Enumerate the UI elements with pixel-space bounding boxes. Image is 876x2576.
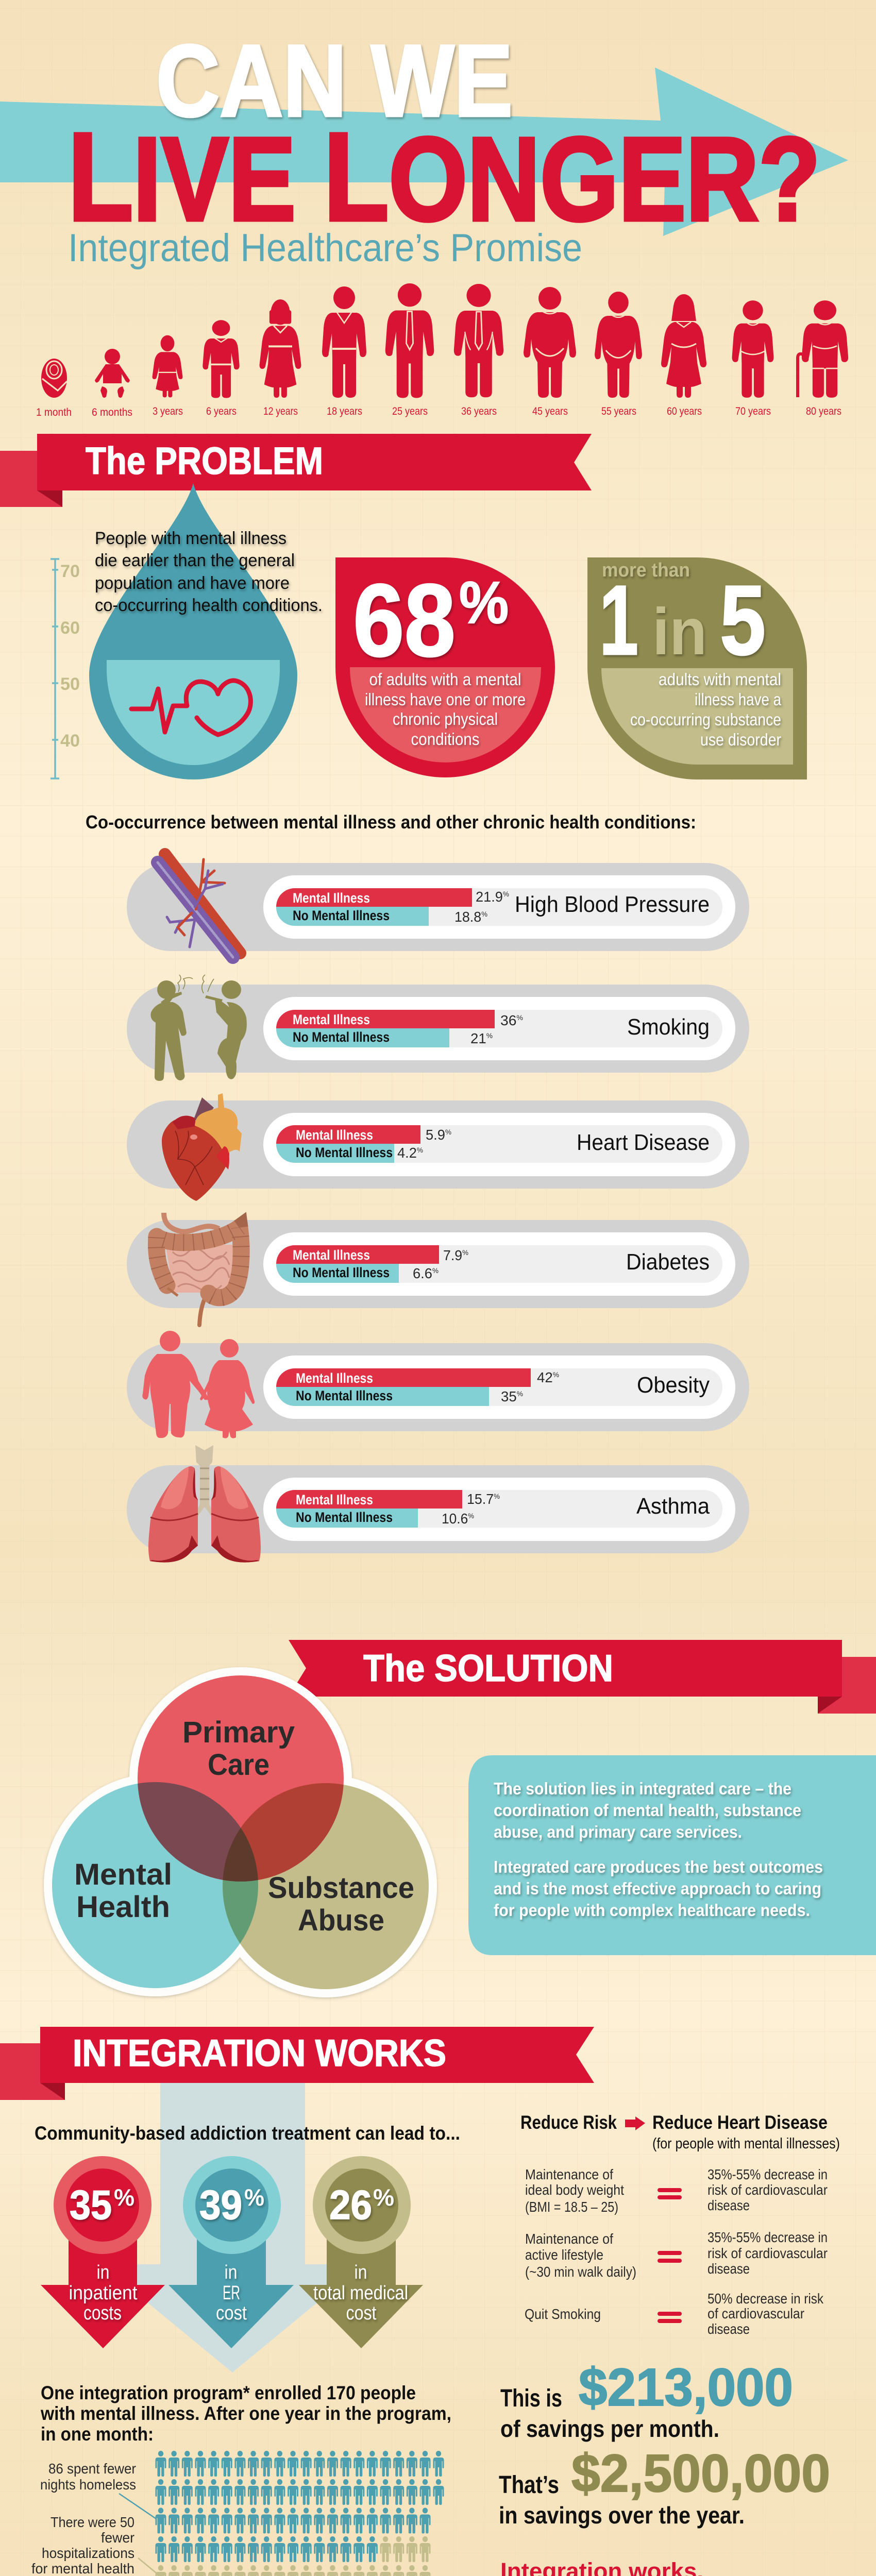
panel: heart disease: Mental Illness (296, 1127, 373, 1143)
panel: 68 percent (335, 557, 555, 777)
list: maintenance of active lifestyle: disease (707, 2261, 750, 2277)
panel: 1 in 5: illness have a (695, 690, 782, 709)
stat arrow: total medical cost: cost (346, 2302, 377, 2324)
heading: one integration program: with mental illness. After one year in the program, (40, 2403, 451, 2424)
panel: obesity: Mental Illness (296, 1370, 373, 1386)
icon: couple (142, 1331, 255, 1438)
text: people with mental illness: die earlier than the general (95, 551, 295, 570)
heading: reduce risk, reduce heart disease (520, 2112, 840, 2152)
pictogram: 170 people (156, 2451, 444, 2576)
icon: 12 years (260, 299, 301, 398)
icon: blood vessel (158, 854, 240, 957)
panel: obesity: 35 (501, 1388, 517, 1404)
labels: ages: 12 years (263, 405, 298, 417)
list: maintenance of ideal body weight: Maintenance of (525, 2166, 613, 2182)
panel: diabetes: Diabetes (626, 1249, 710, 1275)
labels: ages: 25 years (392, 405, 428, 417)
banner: integration works: INTEGRATION WORKS (73, 2032, 446, 2074)
stat arrow: inpatient costs: in (97, 2262, 109, 2283)
chart: venn diagram (44, 1667, 437, 1997)
panel: heart disease: Heart Disease (577, 1130, 710, 1155)
labels: ages: 6 months (92, 406, 132, 418)
icon: 45 years (524, 287, 576, 398)
banner: the problem: The PROBLEM (86, 439, 323, 482)
heading: co-occurrence: Co-occurrence between mental illness and other chronic health conditions: (86, 811, 696, 833)
panel: smoking (127, 985, 749, 1073)
panel: 1 in 5 (587, 557, 807, 779)
icon: lungs (148, 1445, 261, 1563)
labels: ages: 3 years (153, 405, 183, 417)
panel: solution text: The solution lies in integrated care – the (494, 1779, 791, 1798)
subtitle: Integrated Healthcare’s Promise (68, 226, 582, 270)
life expectancy scale: 70 (60, 562, 80, 581)
heading: reduce risk, reduce heart disease: (for people with mental illnesses) (652, 2136, 840, 2152)
chart: venn diagram: Care (208, 1748, 269, 1782)
text: savings over the year: $2,500,000 (571, 2444, 830, 2503)
stat arrow: inpatient costs: inpatient (69, 2282, 138, 2304)
stat arrow: total medical cost (299, 2156, 423, 2348)
list: maintenance of ideal body weight: risk of cardiovascular (707, 2182, 828, 2198)
list: quit smoking (525, 2291, 824, 2337)
stat arrow: ER cost: ER (223, 2282, 240, 2304)
banner: integration works (0, 2027, 594, 2100)
icon: 25 years (385, 283, 434, 398)
labels: ages: 1 month (36, 406, 72, 418)
list: maintenance of active lifestyle (525, 2229, 828, 2280)
labels: ages: 60 years (667, 405, 702, 417)
banner: the solution: The SOLUTION (363, 1648, 613, 1689)
stat arrow: inpatient costs: costs (83, 2302, 122, 2324)
panel: diabetes: Mental Illness (293, 1247, 370, 1263)
heading: one integration program: in one month: (41, 2424, 154, 2445)
panel: obesity: % (553, 1370, 559, 1379)
icon: 6 months baby (95, 349, 130, 398)
arrow: large pale background (101, 2083, 364, 2372)
banner: the problem (0, 434, 592, 507)
text: savings over the year: in savings over the year. (499, 2502, 745, 2529)
list: maintenance of active lifestyle: active lifestyle (525, 2247, 603, 2263)
panel: solution text (468, 1755, 876, 1955)
panel: smoking: % (516, 1013, 523, 1022)
panel: high blood pressure: High Blood Pressure (515, 892, 710, 917)
panel: smoking: 21 (470, 1030, 486, 1046)
list: maintenance of ideal body weight: ideal body weight (525, 2182, 624, 2198)
arrow: red (625, 2116, 645, 2130)
panel: smoking: No Mental Illness (293, 1029, 390, 1045)
panel: asthma: 10.6 (442, 1511, 470, 1527)
panel: asthma: Mental Illness (296, 1492, 373, 1507)
stat arrow: total medical cost: 26 (329, 2182, 372, 2228)
panel: 1 in 5: more than (602, 560, 690, 581)
text: savings per month: This is (500, 2385, 562, 2412)
stat arrow: ER cost: in (225, 2262, 237, 2283)
panel: heart disease (127, 1100, 749, 1189)
chart: venn diagram: Abuse (298, 1904, 384, 1937)
panel: 1 in 5: in (652, 595, 707, 669)
stat arrow: inpatient costs: % (114, 2184, 134, 2211)
labels: ages: 80 years (806, 405, 841, 417)
panel: smoking: Mental Illness (293, 1012, 370, 1027)
list: quit smoking: of cardiovascular (707, 2306, 804, 2321)
panel: heart disease: No Mental Illness (296, 1145, 393, 1160)
panel: 1 in 5: 1 (599, 565, 638, 675)
panel: 1 in 5: co-occurring substance (630, 710, 781, 729)
text: people with mental illness: People with mental illness (95, 529, 287, 548)
panel: high blood pressure: % (481, 910, 487, 918)
panel: 1 in 5: 5 (720, 565, 766, 675)
panel: 68 percent: chronic physical (393, 709, 498, 728)
text: people with mental illness (95, 529, 323, 615)
icon: 3 years (153, 335, 182, 397)
text: people with mental illness: population and have more (95, 573, 290, 593)
list: maintenance of ideal body weight: disease (707, 2197, 750, 2213)
text: savings per month: $213,000 (579, 2358, 793, 2417)
icon: 70 years (732, 300, 773, 398)
panel: high blood pressure: No Mental Illness (293, 908, 390, 923)
text: savings per month: of savings per month. (500, 2415, 719, 2442)
panel: smoking: 36 (500, 1012, 516, 1028)
panel: diabetes (127, 1220, 749, 1308)
heading: reduce risk, reduce heart disease: Reduce Heart Disease (652, 2112, 828, 2133)
stat arrow: ER cost: cost (216, 2302, 247, 2324)
icon: heart (162, 1093, 242, 1201)
panel: obesity: No Mental Illness (296, 1388, 393, 1403)
icon: 60 years (661, 294, 706, 398)
panel: asthma: No Mental Illness (296, 1510, 393, 1525)
panel: asthma: 15.7 (467, 1491, 495, 1507)
chart: life stages figures (41, 283, 848, 398)
list: maintenance of active lifestyle: 35%-55% decrease in (707, 2229, 828, 2245)
panel: asthma: Asthma (636, 1494, 710, 1519)
stat arrow: total medical cost: total medical (313, 2282, 408, 2304)
chart: venn diagram: Health (76, 1890, 170, 1924)
labels: ages: 6 years (206, 405, 237, 417)
panel: heart disease: % (417, 1146, 423, 1154)
title: Can we: CAN WE (156, 24, 513, 138)
labels: pictogram callouts: 86 spent fewer (48, 2461, 136, 2477)
chart: venn diagram: Mental (74, 1858, 172, 1891)
panel: diabetes: 7.9 (443, 1247, 463, 1263)
title: Live longer: LIVE LONGER? (68, 107, 820, 247)
panel: high blood pressure: 18.8 (454, 909, 482, 925)
icon: 1 month baby (41, 359, 67, 398)
life expectancy scale: 50 (60, 674, 80, 694)
labels: pictogram callouts (31, 2461, 162, 2576)
panel: obesity: 42 (537, 1369, 553, 1385)
panel: asthma: % (494, 1492, 500, 1500)
chart: venn diagram: Substance (268, 1871, 414, 1905)
heading: one integration program (40, 2382, 451, 2445)
stat arrow: ER cost: % (244, 2184, 264, 2211)
stat arrow: ER cost: 39 (199, 2182, 242, 2228)
text: savings over the year: That’s (499, 2471, 559, 2499)
labels: ages: 18 years (327, 405, 362, 417)
panel: diabetes: No Mental Illness (293, 1265, 390, 1280)
list: maintenance of active lifestyle: (~30 min walk daily) (525, 2264, 636, 2280)
panel: 68 percent: % (459, 570, 509, 636)
text: people with mental illness: co-occurring health conditions. (95, 596, 323, 615)
heading: one integration program: One integration program* enrolled 170 people (41, 2382, 416, 2403)
arrow: title background (0, 67, 848, 236)
labels: pictogram callouts: There were 50 (50, 2514, 134, 2530)
stat arrow: ER cost (169, 2156, 294, 2348)
list: maintenance of active lifestyle: risk of cardiovascular (707, 2245, 828, 2261)
panel: 1 in 5: use disorder (700, 730, 781, 749)
list: quit smoking: 50% decrease in risk (707, 2291, 824, 2307)
panel: diabetes: % (462, 1248, 468, 1257)
panel: solution text: abuse, and primary care services. (494, 1822, 742, 1841)
panel: smoking: % (486, 1031, 493, 1040)
life expectancy scale: 60 (60, 618, 80, 638)
stat arrow: inpatient costs: 35 (70, 2182, 112, 2228)
panel: obesity: Obesity (637, 1372, 710, 1398)
panel: high blood pressure (127, 863, 749, 951)
text: savings over the year (499, 2444, 830, 2529)
panel: solution text: and is the most effective approach to caring (494, 1879, 821, 1898)
panel: heart disease: 4.2 (397, 1145, 417, 1161)
labels: pictogram callouts: fewer (101, 2530, 134, 2546)
icon: 18 years (322, 286, 366, 398)
panel: smoking: Smoking (627, 1014, 710, 1040)
panel: 68 percent: of adults with a mental (369, 670, 521, 689)
panel: heart disease: % (445, 1128, 451, 1136)
labels: ages (36, 405, 841, 418)
panel: 1 in 5: adults with mental (659, 670, 781, 689)
panel: obesity: % (517, 1389, 523, 1398)
list: maintenance of active lifestyle: Maintenance of (525, 2231, 613, 2247)
labels: ages: 45 years (532, 405, 568, 417)
labels: ages: 36 years (461, 405, 497, 417)
panel: obesity (127, 1343, 749, 1431)
labels: pictogram callouts: nights homeless (40, 2477, 136, 2493)
list: maintenance of ideal body weight (525, 2166, 828, 2215)
list: maintenance of ideal body weight: (BMI = 18.5 – 25) (525, 2199, 618, 2215)
labels: pictogram callouts: hospitalizations (42, 2545, 134, 2561)
heading: reduce risk, reduce heart disease: Reduce Risk (520, 2112, 617, 2133)
icon: 36 years (454, 284, 503, 397)
list: quit smoking: disease (707, 2321, 750, 2337)
stat arrow: total medical cost: in (355, 2262, 367, 2283)
icon: intestines (156, 1213, 241, 1325)
text: savings per month (500, 2358, 793, 2442)
icon: 80 years with cane (798, 300, 848, 398)
labels: ages: 55 years (601, 405, 636, 417)
chart: venn diagram: Primary (182, 1716, 295, 1749)
icon: water drop with heart (89, 483, 297, 779)
panel: solution text: Integrated care produces the best outcomes (494, 1857, 823, 1876)
panel: diabetes: 6.6 (413, 1265, 433, 1281)
stat arrow: inpatient costs (41, 2156, 165, 2348)
panel: high blood pressure: 21.9 (476, 889, 504, 905)
panel: asthma (127, 1465, 749, 1553)
labels: ages: 70 years (735, 405, 771, 417)
panel: diabetes: % (432, 1266, 439, 1275)
list: maintenance of ideal body weight: 35%-55% decrease in (707, 2166, 828, 2182)
panel: asthma: % (468, 1512, 474, 1520)
icon: 6 years (203, 320, 240, 398)
life expectancy scale (50, 559, 80, 778)
panel: 68 percent: 68 (353, 563, 456, 678)
heading: community-based treatment: Community-based addiction treatment can lead to... (35, 2123, 460, 2144)
banner: the solution (289, 1640, 876, 1714)
stat arrow: total medical cost: % (373, 2184, 394, 2211)
icon: smokers (150, 975, 247, 1081)
panel: 68 percent: illness have one or more (365, 690, 526, 709)
icon: 55 years (595, 292, 642, 398)
panel: high blood pressure: % (503, 890, 509, 898)
panel: heart disease: 5.9 (426, 1127, 446, 1143)
panel: 68 percent: conditions (411, 730, 479, 749)
panel: solution text: coordination of mental health, substance (494, 1801, 801, 1820)
life expectancy scale: 40 (60, 731, 80, 751)
panel: solution text: for people with complex healthcare needs. (494, 1901, 810, 1920)
panel: high blood pressure: Mental Illness (293, 890, 370, 906)
list: quit smoking: Quit Smoking (525, 2306, 601, 2322)
